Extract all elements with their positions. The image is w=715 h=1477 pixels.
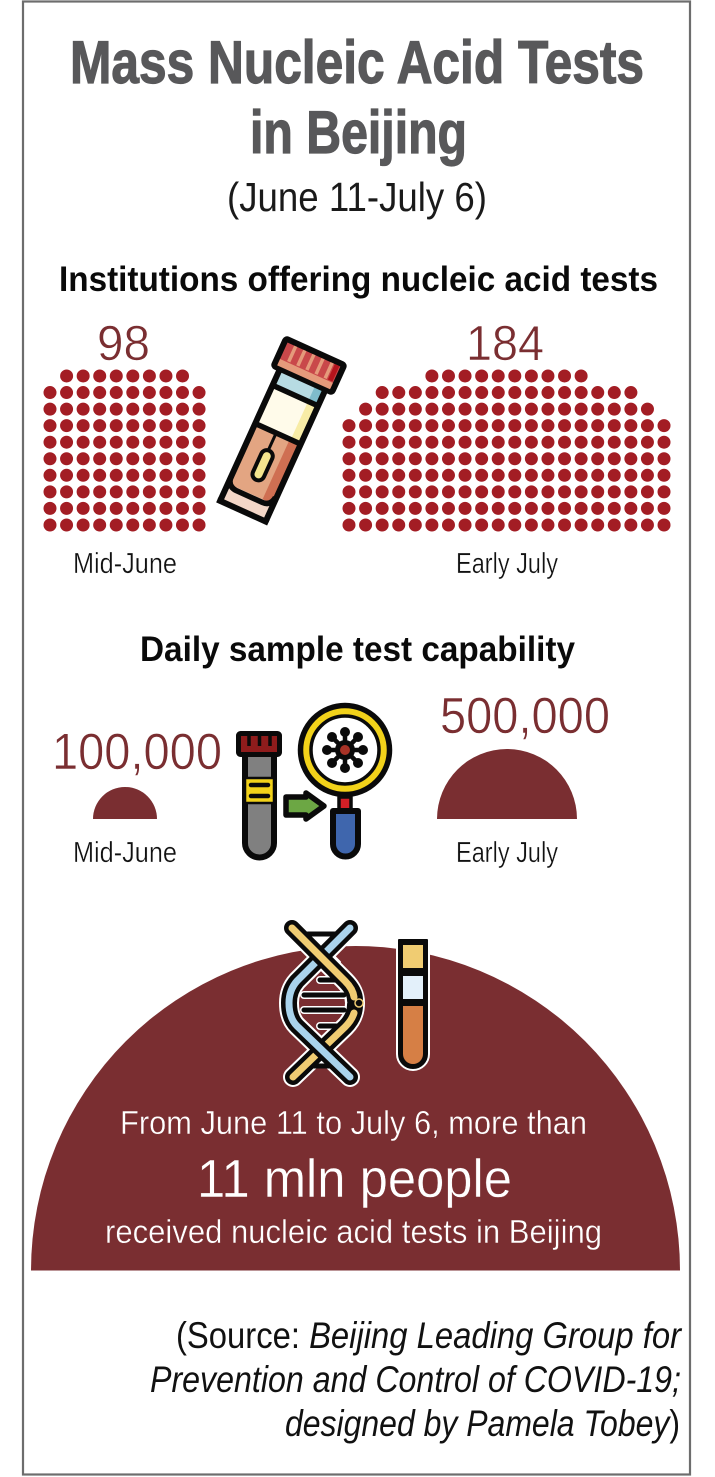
icon: swab sample tube (214, 339, 344, 524)
label: mid-June capability: Mid-June (73, 837, 177, 869)
semicircle: 100,000 capability (93, 787, 157, 819)
heading: institutions: Institutions offering nucleic acid tests (59, 260, 658, 299)
number: 184 institutions: 184 (466, 317, 544, 371)
title: in Beijing (250, 99, 467, 166)
dot chart: 98 institutions mid-June (50, 376, 199, 525)
icon: filled test tube (397, 938, 429, 1070)
number: 100,000: 100,000 (52, 723, 222, 780)
semicircle: 500,000 capability (437, 749, 577, 819)
source note: (Source: Beijing Leading Group for (176, 1315, 682, 1356)
title (70, 29, 644, 166)
label: early July capability: Early July (456, 837, 558, 869)
number: 98 institutions: 98 (97, 317, 150, 371)
heading: daily capability: Daily sample test capability (140, 630, 576, 669)
source note (150, 1315, 682, 1444)
callout: people tested: received nucleic acid tests in Beijing (105, 1213, 602, 1250)
dot chart: 184 institutions early July (349, 376, 664, 525)
callout: people tested (105, 1104, 602, 1250)
icon: DNA helix (289, 928, 363, 1077)
number: 500,000: 500,000 (440, 687, 610, 744)
callout: people tested: 11 mln people (197, 1149, 512, 1209)
panel: total people tested dome (31, 946, 680, 1270)
subtitle: date range: (June 11-July 6) (227, 174, 487, 220)
label: mid-June: Mid-June (73, 548, 177, 580)
icon: test tube, arrow and magnifier (238, 706, 390, 858)
label: early July: Early July (456, 548, 558, 580)
callout: people tested: From June 11 to July 6, more than (120, 1104, 587, 1141)
